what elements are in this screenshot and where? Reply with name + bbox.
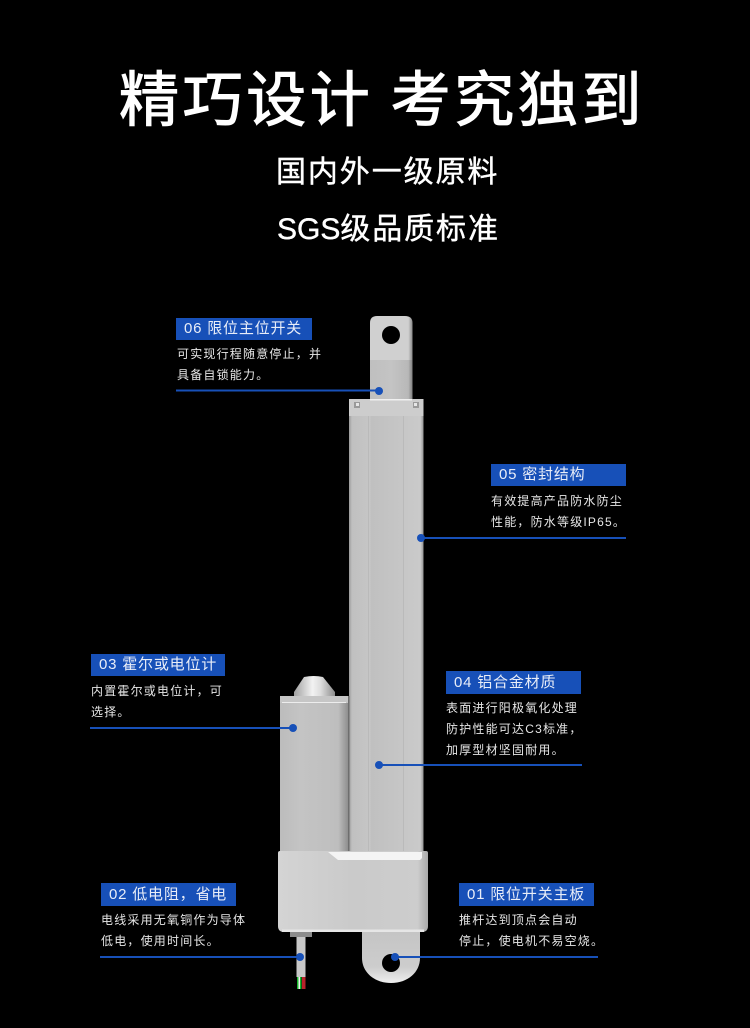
- description 04: 防护性能可达C3标准，: [446, 722, 583, 736]
- description 06: [177, 347, 322, 382]
- description 04: 加厚型材坚固耐用。: [446, 743, 565, 757]
- label 02: [101, 883, 236, 906]
- mounting lug at the bottom: [362, 930, 420, 983]
- gearbox base: [278, 851, 428, 932]
- label 01: [459, 883, 594, 906]
- description 02: 低电，使用时间长。: [101, 934, 220, 948]
- label 06: 06 限位主位开关: [184, 320, 302, 337]
- description 06: 具备自锁能力。: [177, 368, 269, 382]
- callout 03: hall or potentiometer: [90, 654, 297, 732]
- description 06: 可实现行程随意停止，并: [177, 347, 322, 361]
- description 05: [491, 494, 626, 529]
- description 04: [446, 701, 583, 757]
- push rod with top eye: [370, 316, 412, 400]
- label 03: 03 霍尔或电位计: [99, 656, 217, 673]
- callout 04: aluminium alloy: [375, 671, 583, 769]
- callout 02: low resistance: [100, 883, 304, 961]
- description 01: 推杆达到顶点会自动: [459, 913, 578, 927]
- description 01: 停止，使电机不易空烧。: [459, 934, 604, 948]
- power cable: [290, 932, 312, 989]
- callout 05: seal structure: [417, 464, 626, 542]
- subtitle line 2: SGS级品质标准: [277, 213, 500, 246]
- description 03: 选择。: [91, 705, 131, 719]
- label 05: 05 密封结构: [499, 466, 585, 483]
- description 02: [101, 913, 246, 948]
- description 04: 表面进行阳极氧化处理: [446, 701, 578, 715]
- description 03: 内置霍尔或电位计，可: [91, 684, 223, 698]
- potentiometer housing: [280, 676, 350, 852]
- description 02: 电线采用无氧铜作为导体: [101, 913, 246, 927]
- label 01: 01 限位开关主板: [467, 886, 585, 903]
- title: 精巧设计 考究独到: [119, 67, 645, 134]
- callout 01: limit switch board: [391, 883, 604, 961]
- description 03: [91, 684, 223, 719]
- label 06: [176, 318, 312, 340]
- description 01: [459, 913, 604, 948]
- label 02: 02 低电阻，省电: [109, 886, 227, 903]
- label 03: [91, 654, 225, 676]
- label 05: [491, 464, 626, 486]
- description 05: 性能，防水等级IP65。: [491, 515, 626, 529]
- label 04: 04 铝合金材质: [454, 674, 556, 691]
- description 05: 有效提高产品防水防尘: [491, 494, 623, 508]
- label 04: [446, 671, 581, 694]
- callout 06: limit switch: [176, 318, 383, 395]
- subtitle line 1: 国内外一级原料: [276, 156, 499, 189]
- main aluminium tube: [349, 399, 424, 852]
